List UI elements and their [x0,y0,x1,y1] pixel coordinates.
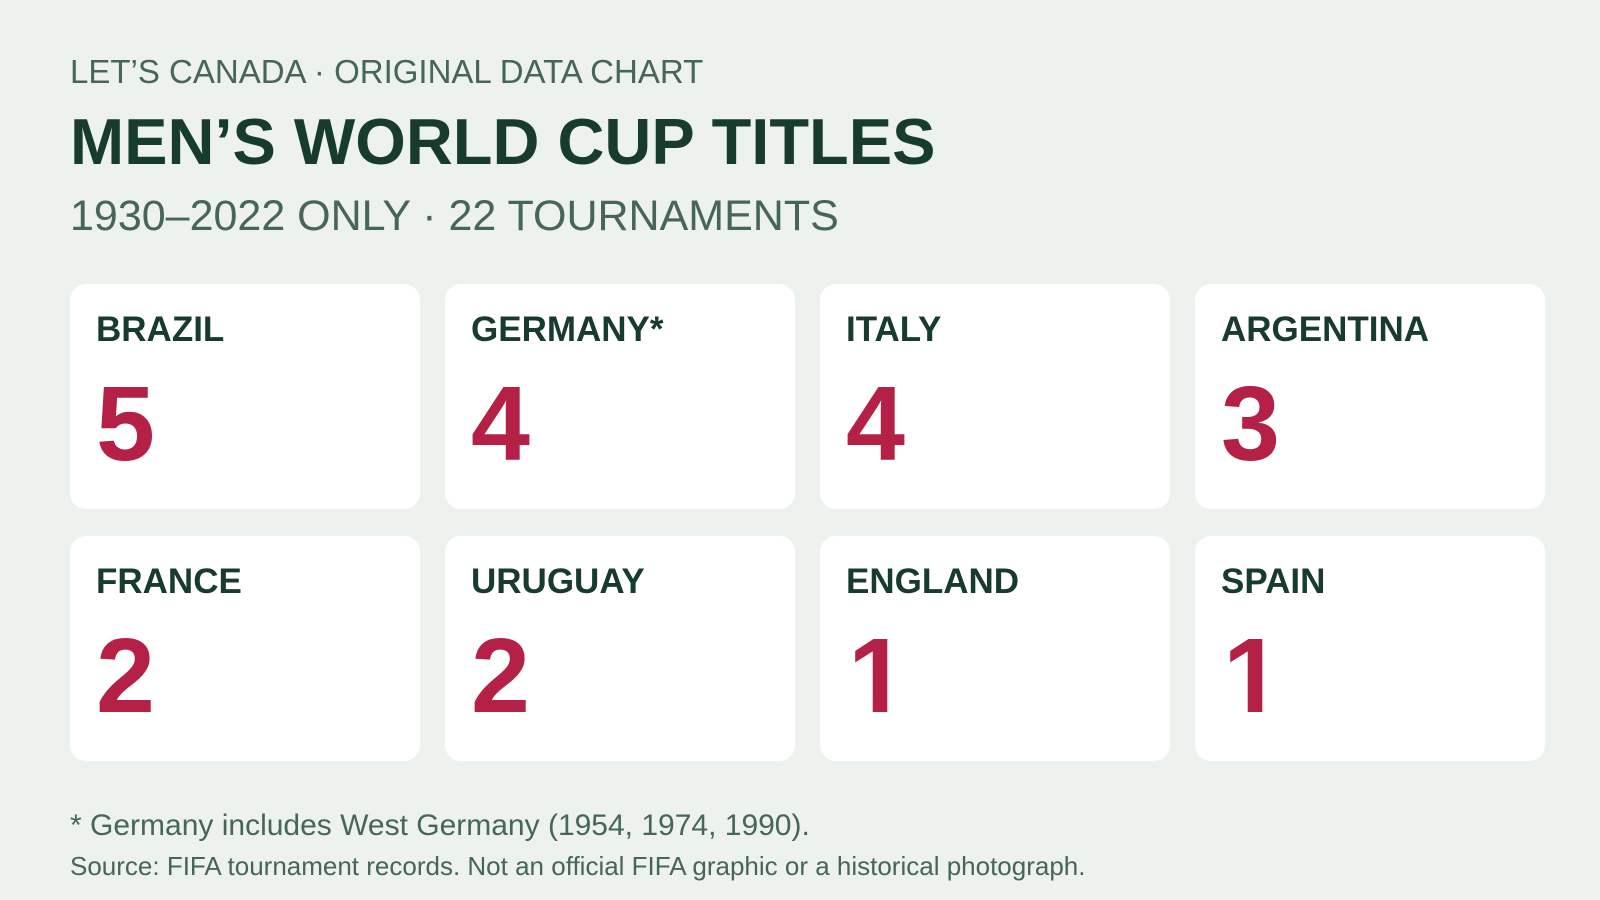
panel: Uruguay [445,536,795,761]
country name: ENGLAND [846,562,1019,601]
title count: 1 [1223,617,1282,735]
panel: Brazil [70,284,420,509]
panel: England [820,536,1170,761]
panel: Germany [445,284,795,509]
country name: SPAIN [1221,562,1325,601]
country name: ITALY [846,310,941,349]
title count: 3 [1221,365,1280,483]
country name: BRAZIL [96,310,224,349]
panel: Italy [820,284,1170,509]
title count: 4 [846,365,905,483]
panel: France [70,536,420,761]
country name: GERMANY* [471,310,664,349]
country name: ARGENTINA [1221,310,1429,349]
source line: Source: FIFA tournament records. Not an official FIFA graphic or a historical photograph. [70,851,1086,881]
title count: 2 [96,617,155,735]
title count: 1 [848,617,907,735]
panel: Argentina [1195,284,1545,509]
title count: 2 [471,617,530,735]
subtitle: 1930–2022 ONLY · 22 TOURNAMENTS [70,192,839,240]
eyebrow: LET’S CANADA · ORIGINAL DATA CHART [70,53,703,90]
title: MEN’S WORLD CUP TITLES [70,105,935,178]
title count: 4 [471,365,530,483]
country name: FRANCE [96,562,242,601]
title count: 5 [96,365,155,483]
panel: Spain [1195,536,1545,761]
footnote: * Germany includes West Germany (1954, 1974, 1990). [70,809,810,842]
country name: URUGUAY [471,562,645,601]
